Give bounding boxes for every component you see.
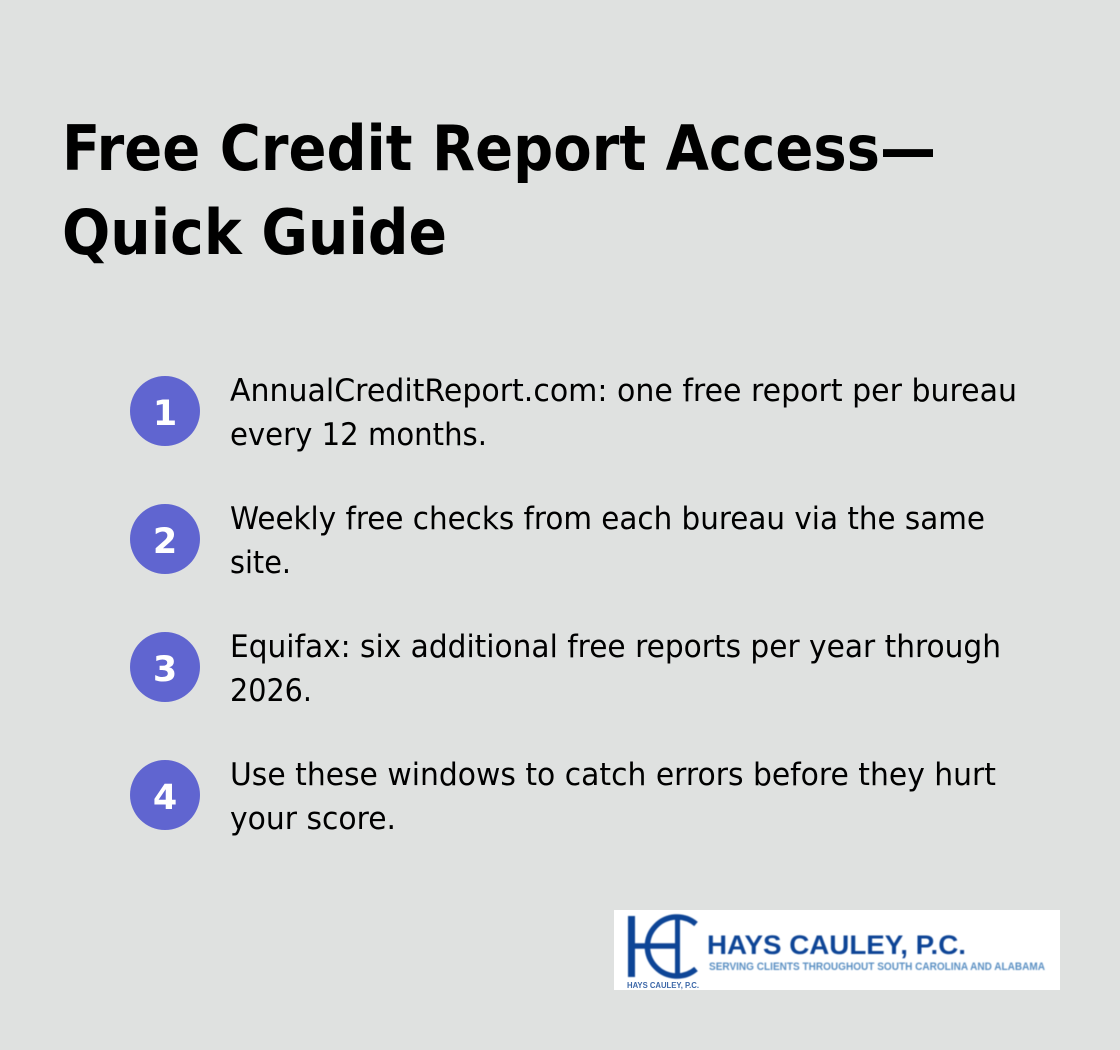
icon: HC monogram [631, 916, 696, 977]
item 1 text: AnnualCreditReport.com: one free report per bureau [230, 373, 1017, 409]
list item 4 [130, 757, 996, 837]
list item 1 [130, 373, 1017, 453]
item 2 text: site. [230, 545, 291, 581]
title [62, 112, 936, 269]
number badge 4: 4 [153, 778, 177, 818]
item 2 text [230, 501, 985, 581]
list item 3 [130, 629, 1001, 709]
logo tagline: SERVING CLIENTS THROUGHOUT SOUTH CAROLINA AND ALABAMA [709, 961, 1045, 973]
item 3 text: 2026. [230, 673, 312, 709]
item 4 text: your score. [230, 801, 396, 837]
title: Free Credit Report Access— [62, 112, 936, 185]
number badge 1: 1 [153, 394, 177, 434]
number badge 2 [130, 504, 200, 574]
item 2 text: Weekly free checks from each bureau via the same [230, 501, 985, 537]
list item 2 [130, 501, 985, 581]
number badge 4 [130, 760, 200, 830]
item 4 text [230, 757, 996, 837]
item 3 text: Equifax: six additional free reports per year through [230, 629, 1001, 665]
logo small caption: HAYS CAULEY, P.C. [627, 981, 699, 990]
item 4 text: Use these windows to catch errors before they hurt [230, 757, 996, 793]
number badge 2: 2 [153, 522, 177, 562]
title: Quick Guide [62, 196, 447, 269]
number badge 1 [130, 376, 200, 446]
logo name: HAYS CAULEY, P.C. [707, 930, 966, 960]
number badge 3 [130, 632, 200, 702]
item 1 text: every 12 months. [230, 417, 487, 453]
logo: Hays Cauley, P.C. [614, 910, 1060, 990]
number badge 3: 3 [153, 650, 177, 690]
item 1 text [230, 373, 1017, 453]
item 3 text [230, 629, 1001, 709]
